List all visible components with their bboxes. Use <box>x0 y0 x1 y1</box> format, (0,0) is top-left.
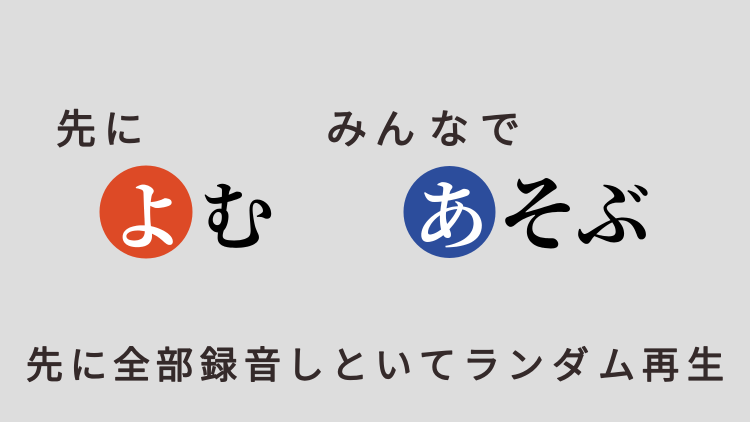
caption: record everything first and play back at random: い <box>375 345 412 386</box>
icon: blue circle with a: あ <box>413 177 489 260</box>
caption: record everything first and play back at random: 部 <box>156 345 193 386</box>
heading: read first: 先 <box>56 108 96 152</box>
caption: record everything first and play back at random <box>26 345 724 386</box>
icon: red circle with yo: よ <box>110 178 184 260</box>
label: sobu <box>497 170 650 261</box>
caption: record everything first and play back at random: ダ <box>552 345 589 386</box>
caption: record everything first and play back at random: 再 <box>642 345 679 386</box>
caption: record everything first and play back at random: 音 <box>244 345 281 386</box>
caption: record everything first and play back at random: ン <box>507 345 544 386</box>
heading: play together: ん <box>375 108 415 152</box>
heading: play together: で <box>480 108 520 152</box>
heading: play together: な <box>429 108 469 152</box>
caption: record everything first and play back at random: し <box>287 345 324 386</box>
label: sobu: そ <box>497 170 579 261</box>
caption: record everything first and play back at random: ム <box>598 345 635 386</box>
caption: record everything first and play back at random: ラ <box>463 345 500 386</box>
heading: play together: み <box>326 106 367 152</box>
label: mu: む <box>200 178 274 260</box>
caption: record everything first and play back at random: と <box>331 345 368 386</box>
icon: red circle with yo <box>100 166 192 260</box>
caption: record everything first and play back at random: 録 <box>200 345 237 386</box>
caption: record everything first and play back at random: 生 <box>687 345 724 386</box>
caption: record everything first and play back at random: に <box>70 345 107 386</box>
caption: record everything first and play back at random: 先 <box>26 345 63 386</box>
label: sobu: ぶ <box>576 176 650 258</box>
heading: play together <box>326 106 520 152</box>
caption: record everything first and play back at random: て <box>419 345 456 386</box>
heading: read first: に <box>104 109 143 152</box>
heading: read first <box>56 108 143 152</box>
caption: record everything first and play back at random: 全 <box>113 345 150 386</box>
